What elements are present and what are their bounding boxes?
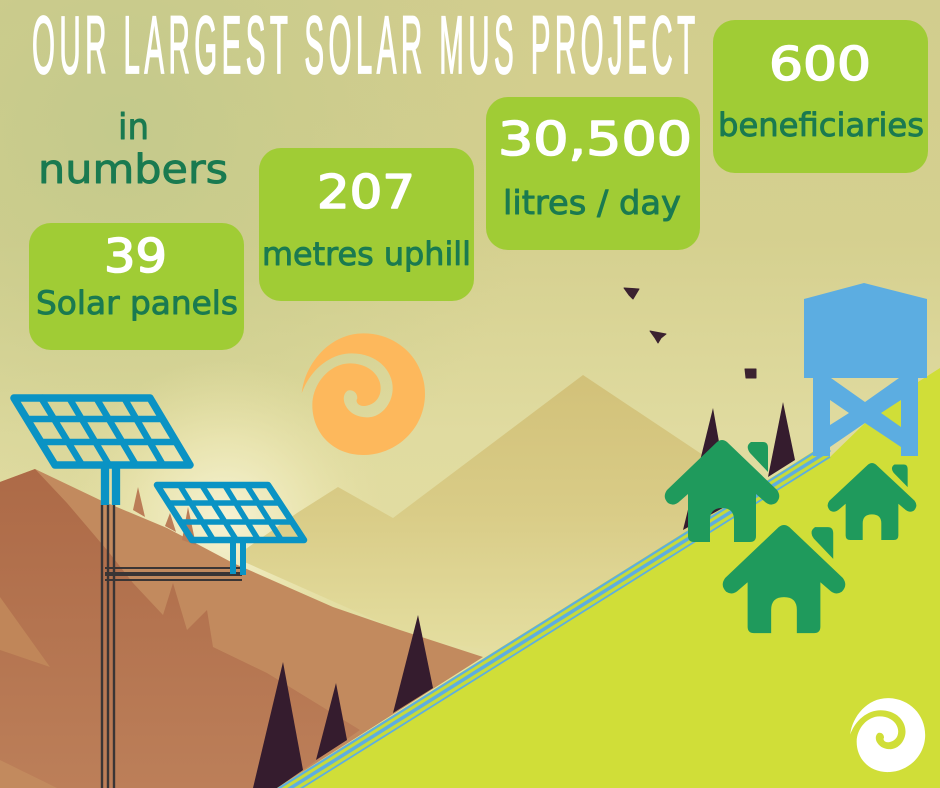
panel: solar panels stat: 39 xyxy=(104,229,167,283)
icon: house xyxy=(828,463,916,540)
sky green tint xyxy=(0,0,940,560)
small distant trees xyxy=(133,487,196,545)
panel: metres uphill stat: metres uphill xyxy=(262,235,471,273)
panel: solar panels stat xyxy=(29,223,244,350)
icon: white swirl logo xyxy=(850,698,925,772)
pipeline stripes along the hill xyxy=(277,441,830,788)
background tan mountains xyxy=(240,375,790,660)
sky glow xyxy=(0,340,420,700)
panel: litres per day stat xyxy=(486,97,700,250)
icon: large solar panel xyxy=(14,396,190,505)
icon: house xyxy=(723,525,845,633)
panel: solar panels stat: Solar panels xyxy=(36,284,238,322)
subtitle xyxy=(38,107,228,193)
icon: small solar panel xyxy=(157,484,304,575)
icon: wiring xyxy=(102,505,242,788)
dark pine trees xyxy=(253,402,795,788)
panel: beneficiaries stat: beneficiaries xyxy=(718,106,924,144)
subtitle: in xyxy=(118,107,149,148)
panel: litres per day stat: litres / day xyxy=(503,183,681,222)
icon: house xyxy=(665,440,779,542)
icon: water tower xyxy=(804,283,927,456)
brown foreground mountains xyxy=(0,469,483,788)
panel: metres uphill stat xyxy=(259,148,474,301)
panel: beneficiaries stat xyxy=(713,20,928,173)
panel: metres uphill stat: 207 xyxy=(317,165,415,219)
subtitle: numbers xyxy=(38,147,228,193)
panel: litres per day stat: 30,500 xyxy=(498,112,692,166)
panel: beneficiaries stat: 600 xyxy=(769,37,871,91)
birds xyxy=(624,288,756,378)
green hill xyxy=(303,368,940,788)
icon: orange swirl sun xyxy=(302,333,425,455)
title: OUR LARGEST SOLAR MUS PROJECT xyxy=(32,0,695,92)
